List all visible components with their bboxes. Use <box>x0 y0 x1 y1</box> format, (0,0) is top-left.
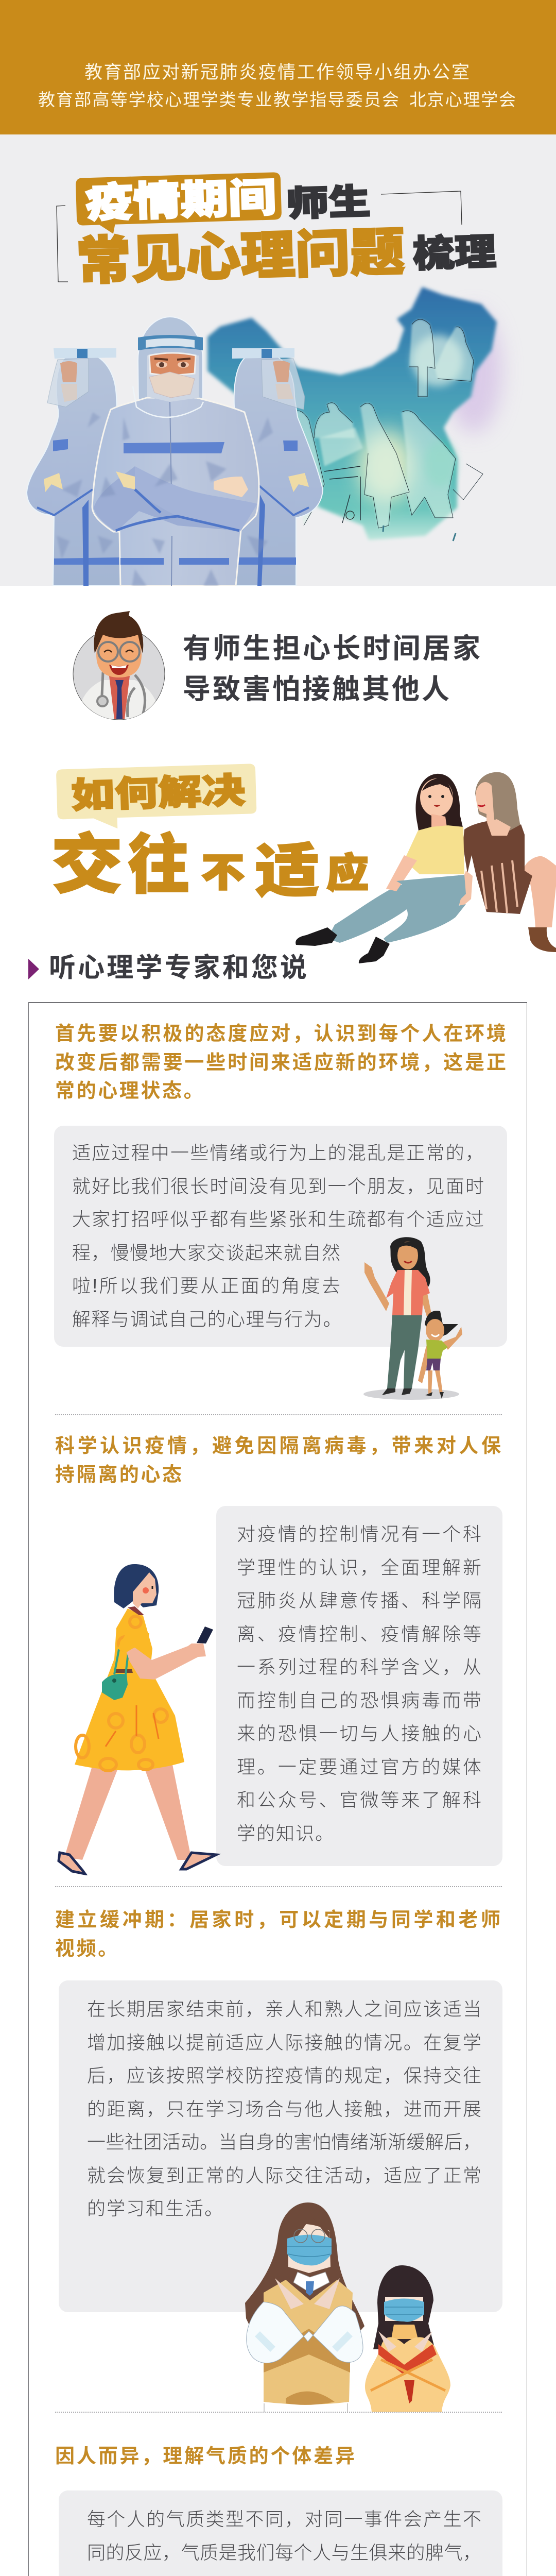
illustration: two masked students <box>245 2202 450 2412</box>
tip 2 body text: 学理性的认识，全面理解新 <box>237 1557 481 1578</box>
tip 2 body text: 冠肺炎从肆意传播、科学隔 <box>237 1590 481 1611</box>
tip 2 text box <box>216 1506 502 1866</box>
tip 3 body text: 在长期居家结束前，亲人和熟人之间应该适当 <box>87 1998 481 2020</box>
tip 2 body text: 一系列过程的科学含义，从 <box>237 1656 481 1677</box>
tip 3 body text: 增加接触以提前适应人际接触的情况。在复学 <box>87 2032 481 2053</box>
staff member: left <box>27 348 129 586</box>
tip 1 text box <box>54 1126 507 1347</box>
organiser line 1: 教育部应对新冠肺炎疫情工作领导小组办公室 <box>84 62 470 82</box>
illustration: mother and child waving <box>363 1237 462 1400</box>
woman in yellow top <box>296 774 466 963</box>
tip 2 body text: 对疫情的控制情况有一个科 <box>237 1523 481 1545</box>
tip 2 heading <box>55 1435 501 1486</box>
older student <box>245 2202 364 2412</box>
tip 1 body text: 解释与调试自己的心理与行为。 <box>72 1309 342 1329</box>
title: social adaptation difficulty: 往 <box>128 829 189 899</box>
tip 1 heading: 首先要以积极的态度应对，认识到每个人在环境 <box>55 1023 506 1045</box>
speech bubble with title words <box>76 172 282 235</box>
bubble: how to solve: 如何解决 <box>71 771 246 816</box>
avatar: doctor <box>73 611 165 720</box>
tip 3 heading: 建立缓冲期：居家时，可以定期与同学和老师 <box>55 1909 500 1931</box>
bubble: how to solve <box>56 764 257 831</box>
concern statement <box>183 633 480 705</box>
tip 3 body text: 的学习和生活。 <box>87 2198 224 2219</box>
tip 4 body text: 每个人的气质类型不同，对同一事件会产生不 <box>87 2509 481 2530</box>
staff member: right <box>231 348 323 586</box>
woman in brown dress <box>456 772 556 952</box>
tip 2 heading: 持隔离的心态 <box>55 1464 184 1486</box>
tip 2 body text: 理。一定要通过官方的媒体 <box>237 1756 481 1777</box>
speech bubble with title words: 疫情期间 <box>85 175 276 226</box>
tip 2 heading: 科学认识疫情，避免因隔离病毒，带来对人保 <box>55 1435 501 1457</box>
panel: expert advice <box>28 1002 527 2576</box>
younger student <box>365 2265 450 2412</box>
child <box>418 1311 462 1399</box>
how-to-solve title <box>51 764 369 899</box>
divider <box>55 2412 502 2413</box>
divider <box>55 1414 502 1415</box>
tip 1 body text: 就好比我们很长时间没有见到一个朋友，见面时 <box>72 1176 484 1196</box>
tip 4 text box <box>59 2490 502 2576</box>
tip 3 text box <box>59 1980 502 2312</box>
mother <box>364 1237 433 1395</box>
tip 1 body text: 大家打招呼似乎都有些紧张和生疏都有个适应过 <box>72 1209 484 1230</box>
staff member: centre <box>92 317 259 586</box>
tip 2 body text: 学的知识。 <box>237 1823 335 1843</box>
organiser line 2: 北京心理学会 <box>409 90 516 109</box>
title: social adaptation difficulty: 不 <box>201 851 245 895</box>
tip 1 body text <box>72 1142 484 1329</box>
map of China watercolor <box>207 287 502 541</box>
title word: review: 梳理 <box>412 232 497 275</box>
tip 3 body text: 的距离，只在学习场合与他人接触，进而开展 <box>87 2098 481 2120</box>
tip 1 heading: 常的心理状态。 <box>55 1080 205 1102</box>
tip 2 body text: 来的恐惧一切与人接触的心 <box>237 1723 481 1744</box>
concern statement: 有师生担心长时间居家 <box>183 633 480 664</box>
divider <box>55 1886 502 1887</box>
tip 2 body text: 离、疫情控制、疫情解除等 <box>237 1623 481 1645</box>
title: social adaptation difficulty: 应 <box>326 851 369 896</box>
tip 1 heading <box>55 1023 506 1102</box>
tip 3 body text: 就会恢复到正常的人际交往活动，适应了正常 <box>87 2165 481 2185</box>
tip 1 body text: 程，慢慢地大家交谈起来就自然 <box>72 1242 340 1263</box>
tip 3 heading: 视频。 <box>55 1938 119 1960</box>
tip 1 body text: 适应过程中一些情绪或行为上的混乱是正常的， <box>72 1142 484 1163</box>
tip 2 body text: 而控制自己的恐惧病毒而带 <box>237 1690 481 1710</box>
hero title <box>56 172 497 289</box>
illustration: two women talking <box>296 772 556 963</box>
title: social adaptation difficulty: 交 <box>51 829 123 899</box>
illustration: medical staff and map <box>26 284 510 586</box>
tip 3 body text <box>87 1998 481 2219</box>
title word: teachers and students: 师生 <box>286 182 371 224</box>
header band <box>0 0 556 134</box>
tip 3 body text: 一些社团活动。当自身的害怕情绪渐渐缓解后， <box>87 2131 481 2153</box>
section heading marker <box>28 959 39 979</box>
tip 4 body text: 同的反应，气质是我们每个人与生俱来的脾气， <box>87 2542 481 2563</box>
illustration: woman in yellow dress with phone <box>57 1564 221 1875</box>
tip 2 body text <box>237 1523 481 1843</box>
title: social adaptation difficulty <box>51 829 369 904</box>
section heading: 听心理学专家和您说 <box>49 953 307 983</box>
tip 3 body text: 后，应该按照学校防控疫情的规定，保持交往 <box>87 2065 481 2086</box>
organiser line 2: 教育部高等学校心理学类专业教学指导委员会 <box>38 90 399 109</box>
tip 2 body text: 和公众号、官微等来了解科 <box>237 1789 481 1810</box>
tip 3 heading <box>55 1909 500 1960</box>
tip 4 body text <box>87 2509 481 2576</box>
sketched doctors on the map <box>293 319 474 528</box>
tip 1 heading: 改变后都需要一些时间来适应新的环境，这是正 <box>55 1052 506 1074</box>
hero panel <box>0 134 556 586</box>
tip 4 heading: 因人而异，理解气质的个体差异 <box>55 2446 355 2467</box>
concern statement: 导致害怕接触其他人 <box>183 674 451 705</box>
title brackets <box>57 191 462 282</box>
tip 1 body text: 啦!所以我们要从正面的角度去 <box>72 1275 340 1296</box>
